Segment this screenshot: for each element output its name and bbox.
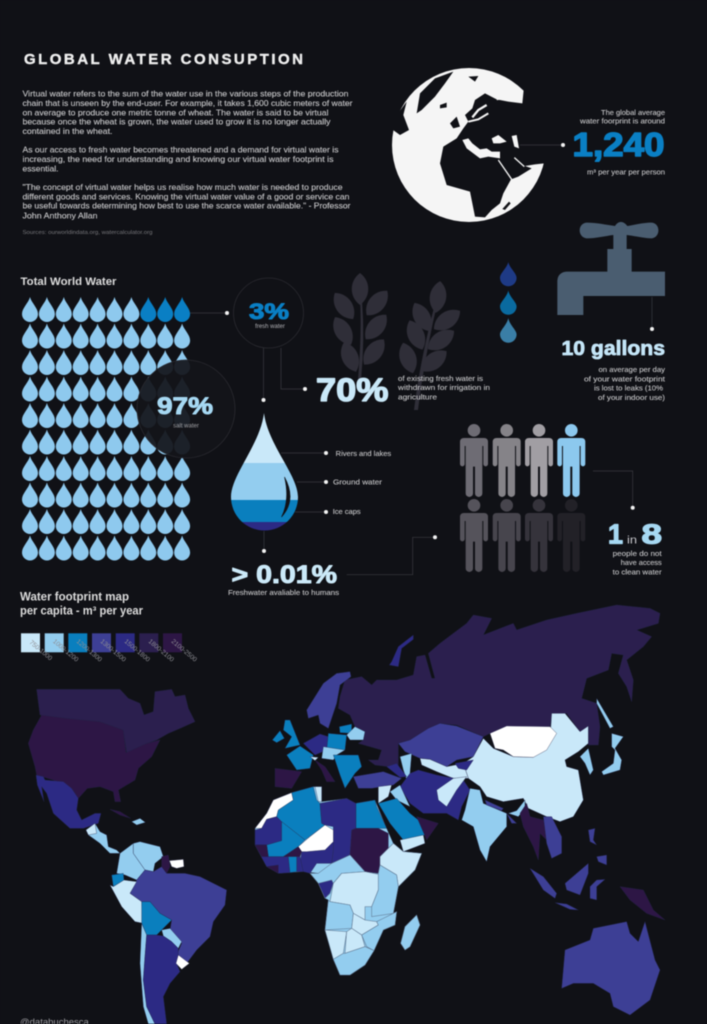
intro text block: increasing, the need for understanding and knowing our virtual water footprint is bbox=[22, 155, 334, 164]
stat: 10 gallons: 10 gallons bbox=[562, 338, 665, 360]
intro text block: contained in the wheat. bbox=[22, 127, 112, 136]
drop layer labels bbox=[281, 449, 391, 516]
stat: global footprint 1,240: 1,240 bbox=[572, 126, 664, 163]
map: Europe, Asia, Africa, Oceania bbox=[255, 605, 665, 1015]
stat: 10 gallons: of your indoor use) bbox=[598, 393, 666, 402]
map legend: 1300-1500 bbox=[99, 638, 127, 664]
stat: 1 in 8: have access bbox=[621, 558, 662, 567]
chart: eight people pictogram bbox=[460, 424, 585, 572]
callout: 3% fresh water bbox=[190, 278, 304, 348]
callout: 97% salt water: salt water bbox=[173, 424, 199, 430]
stat: 10 gallons: of your water footprint bbox=[584, 374, 666, 383]
icon: globe bbox=[388, 68, 565, 222]
stat: 70% irrigation: agriculture bbox=[398, 392, 437, 402]
stat: 1 in 8: 8 bbox=[642, 518, 662, 549]
heading: map title bbox=[20, 592, 143, 618]
Russia bbox=[338, 605, 660, 770]
intro text block: essential. bbox=[22, 165, 58, 174]
Africa base bbox=[255, 787, 422, 975]
map legend: 1800-2100 bbox=[147, 638, 175, 664]
stat: 1 in 8: in bbox=[627, 534, 637, 546]
heading: map title: Water footprint map bbox=[20, 592, 129, 604]
stat: global footprint 1,240 bbox=[520, 108, 665, 176]
callout: 97% salt water bbox=[137, 360, 235, 458]
stat: 1 in 8: 1 bbox=[608, 518, 623, 549]
stat: 0.01% freshwater available: Freshwater avaliable to humans bbox=[228, 588, 339, 597]
drop layer labels: Ground water bbox=[333, 478, 383, 486]
callout: 3% fresh water: fresh water bbox=[255, 324, 285, 330]
stat: global footprint 1,240: m³ per year per person bbox=[587, 168, 665, 176]
stat: 70% irrigation: 70% bbox=[316, 372, 388, 408]
stat: global footprint 1,240: The global average bbox=[601, 108, 665, 117]
intro text block: different goods and services. Knowing the virtual water value of a good or service can bbox=[22, 192, 350, 201]
stat: 70% irrigation bbox=[316, 372, 490, 408]
Sub-Saharan Africa bbox=[310, 843, 422, 975]
intro text block: chain that is unseen by the end-user. For example, it takes 1,600 cubic meters of water bbox=[22, 99, 353, 108]
map legend bbox=[21, 633, 198, 664]
drop layer labels: Ice caps bbox=[333, 507, 361, 516]
map legend: 750-1000 bbox=[28, 639, 54, 662]
intro text block: As our access to fresh water becomes threatened and a demand for virtual water is bbox=[22, 146, 339, 155]
intro text block: John Anthony Allan bbox=[22, 211, 98, 220]
stat: 10 gallons: is lost to leaks (10% bbox=[594, 383, 663, 392]
title: GLOBAL WATER CONSUPTION bbox=[24, 51, 303, 68]
stat: 70% irrigation: of existing fresh water is bbox=[398, 374, 483, 383]
callout: 3% fresh water: 3% bbox=[249, 299, 289, 324]
stat: global footprint 1,240: water foorprint is around bbox=[579, 116, 665, 126]
intro text block: on average to produce one metric tonne of wheat. The water is said to be virtual bbox=[22, 108, 329, 117]
intro text block: because once the wheat is grown, the water used to grow it is no longer actually bbox=[22, 118, 331, 127]
stat: 70% irrigation: withdrawn for irrigation in bbox=[397, 383, 490, 392]
stat: 0.01% freshwater available: > 0.01% bbox=[232, 561, 337, 589]
drop layer labels: Rivers and lakes bbox=[336, 449, 391, 458]
icon: big layered drop bbox=[228, 410, 302, 532]
intro text block bbox=[22, 90, 353, 236]
heading: map title: per capita - m³ per year bbox=[20, 606, 143, 618]
map legend: 2100-2500 bbox=[170, 638, 198, 664]
stat: 1 in 8 bbox=[593, 471, 663, 576]
connector: fresh water to 70% bbox=[281, 348, 307, 391]
stat: 1 in 8: to clean water bbox=[613, 567, 662, 576]
intro text block: Sources: ourworldindata.org, watercalculator.org bbox=[22, 230, 152, 236]
icon: tap bbox=[557, 222, 665, 315]
intro text block: Virtual water refers to the sum of the water use in the various steps of the production bbox=[22, 90, 349, 99]
chart: 100 water drops bbox=[22, 297, 190, 560]
stat: 10 gallons bbox=[562, 297, 666, 402]
map legend: 1000-1200 bbox=[51, 638, 80, 664]
heading: total world water: Total World Water bbox=[20, 276, 117, 288]
callout: 97% salt water: 97% bbox=[157, 393, 213, 420]
icon: wheat bbox=[328, 273, 465, 410]
stat: 10 gallons: on average per day bbox=[598, 365, 665, 374]
icon: three falling drops bbox=[500, 262, 517, 343]
stat: 1 in 8: people do not bbox=[613, 549, 663, 558]
intro text block: "The concept of virtual water helps us realise how much water is needed to produce bbox=[22, 183, 342, 192]
intro text block: be useful towards determining how best to use the scarce water available." - Professor bbox=[22, 202, 351, 211]
stat: 0.01% freshwater available bbox=[228, 531, 437, 597]
map legend: 1200-1300 bbox=[75, 638, 103, 664]
map legend: 1500-1800 bbox=[123, 638, 151, 664]
connector: fresh water to drop bbox=[262, 348, 266, 402]
map: Americas bbox=[28, 689, 227, 1024]
